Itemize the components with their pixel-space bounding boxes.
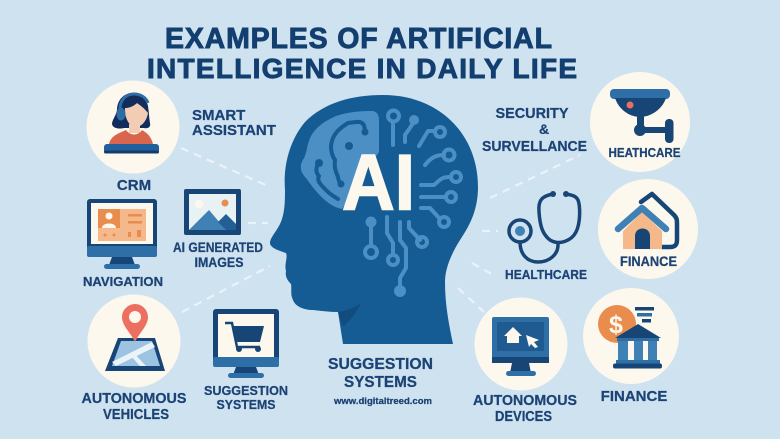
label: autonomous devices [473, 393, 577, 425]
label: autonomous vehicles: AUTONOMOUS [82, 391, 186, 407]
label: finance (bottom): FINANCE [601, 388, 667, 405]
icon: stethoscope [509, 191, 580, 262]
title: INTELLIGENCE IN DAILY LIFE [147, 53, 577, 84]
icon: CRM monitor [87, 199, 157, 269]
brain [301, 111, 379, 209]
label: smart assistant: ASSISTANT [192, 122, 276, 139]
head silhouette [270, 95, 478, 344]
icon: bank and dollar: $ [609, 311, 623, 339]
website url: www.digitaltreed.com [333, 396, 432, 407]
label: suggestion systems (left): SUGGESTION [204, 383, 288, 398]
label: autonomous devices: AUTONOMOUS [473, 393, 577, 409]
label: suggestion systems (center) [328, 356, 433, 391]
AI letters: AI [342, 138, 415, 226]
icon: navigation map pin [88, 294, 180, 388]
label: AI generated images: AI GENERATED [173, 240, 263, 255]
label: smart assistant: SMART [192, 107, 245, 124]
icon: shopping monitor [213, 309, 279, 378]
icon: bank and dollar [583, 288, 679, 384]
label: security and surveillance: SECURITY [496, 105, 568, 122]
label: security and surveillance [482, 105, 587, 155]
label: AI generated images [173, 240, 263, 270]
label: suggestion systems (center): SYSTEMS [344, 374, 417, 391]
circuit traces [365, 110, 461, 285]
icon: autonomous devices monitor [474, 298, 568, 390]
label: navigation: NAVIGATION [83, 274, 163, 289]
label: suggestion systems (center): SUGGESTION [328, 356, 433, 373]
label: suggestion systems (left) [204, 383, 288, 412]
label: AI generated images: IMAGES [194, 255, 244, 270]
icon: security camera [590, 72, 690, 172]
label: autonomous vehicles [82, 391, 186, 423]
label: healthcare: HEALTHCARE [505, 267, 587, 282]
label: finance: FINANCE [620, 254, 677, 269]
label: CRM: CRM [117, 177, 151, 194]
label: autonomous devices: DEVICES [495, 409, 552, 425]
label: security and surveillance: SURVELLANCE [482, 139, 587, 155]
title: EXAMPLES OF ARTIFICIAL [165, 23, 552, 55]
label: security and surveillance: & [539, 121, 549, 137]
label: suggestion systems (left): SYSTEMS [216, 397, 276, 412]
central AI head [270, 95, 478, 344]
title [147, 23, 577, 84]
label: smart assistant [192, 107, 276, 139]
hair [112, 93, 150, 129]
label: autonomous vehicles: VEHICLES [103, 407, 169, 423]
label: heathcare: HEATHCARE [608, 146, 680, 160]
icon: smart assistant (CRM) [86, 80, 180, 174]
icon: house [598, 179, 698, 279]
icon: AI generated image [184, 189, 241, 235]
